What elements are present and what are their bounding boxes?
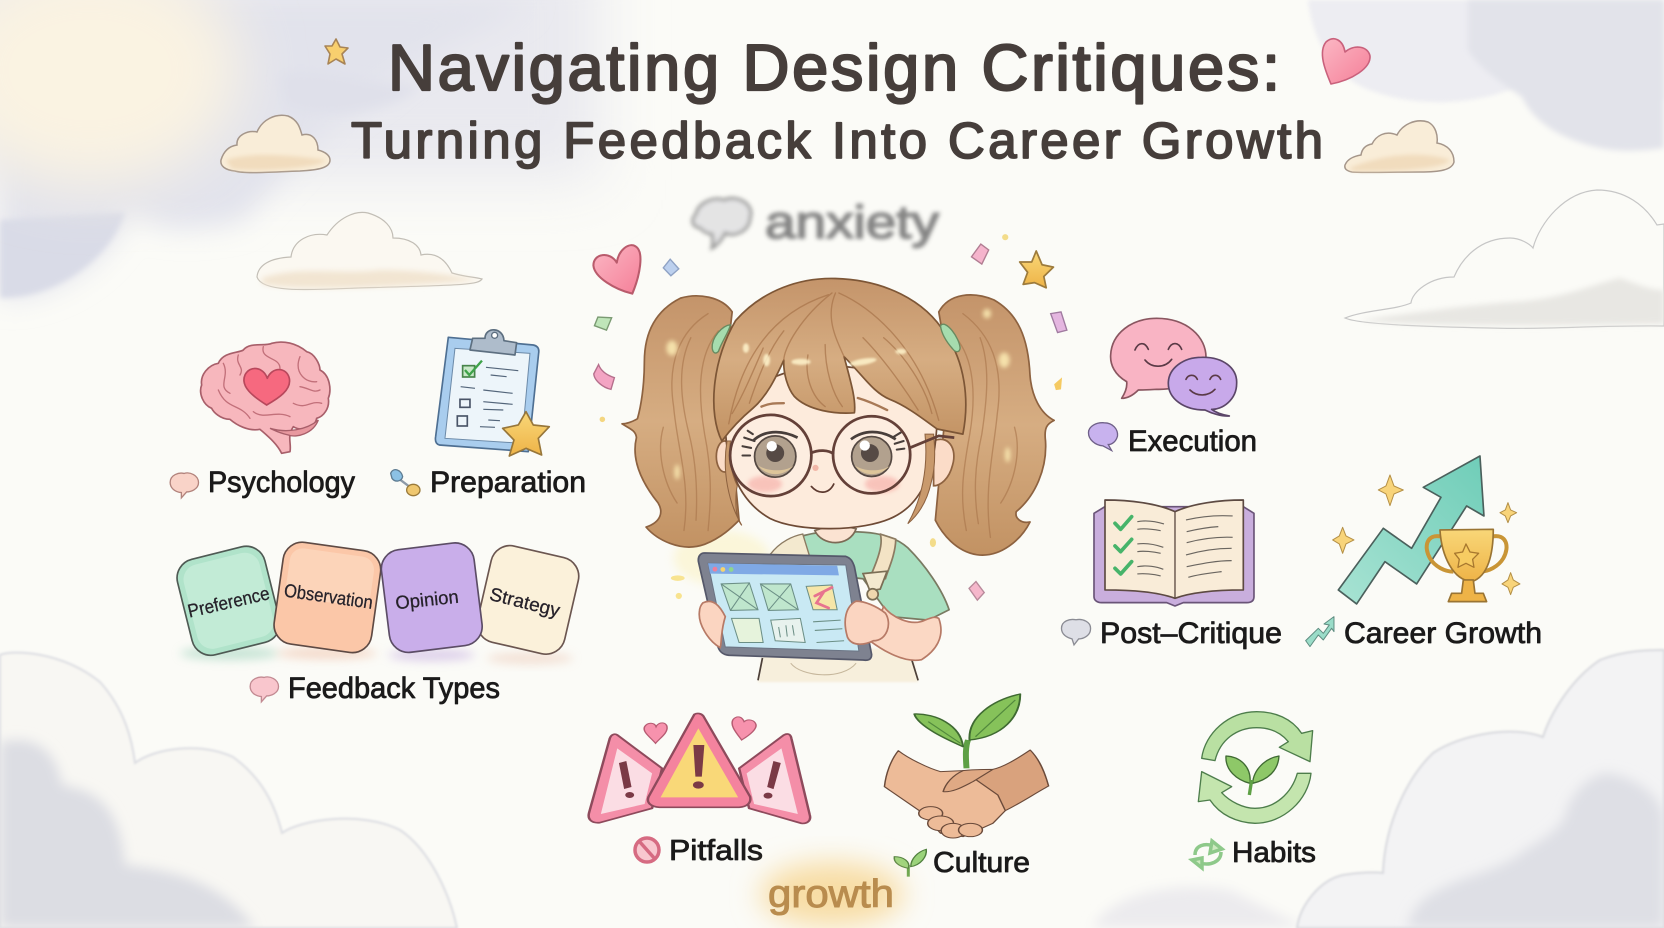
round glasses — [730, 415, 954, 496]
icon: no entry sign — [635, 838, 659, 862]
icon: brain with heart — [201, 342, 330, 453]
label: Post-Critique: Post–Critique — [1100, 617, 1282, 650]
icon: clipboard with star — [435, 330, 549, 456]
icon: pink speech bubble — [250, 677, 279, 702]
label: Career Growth: Career Growth — [1344, 617, 1542, 650]
decoration: title cloud right — [1345, 121, 1454, 172]
leaves — [1226, 756, 1250, 783]
icon: open book with checkmarks — [1094, 500, 1254, 606]
label: Culture: Culture — [933, 847, 1030, 879]
card: Opinion — [379, 541, 484, 655]
card labels: Strategy — [488, 583, 563, 621]
growth glowing label — [760, 862, 904, 926]
left warning triangle — [589, 734, 662, 823]
card: Strategy — [473, 542, 583, 658]
label: Execution: Execution — [1128, 425, 1257, 458]
background: bottom-right cloud — [1092, 650, 1664, 928]
hands on tablet — [699, 601, 888, 648]
icon: smiling chat bubbles — [1111, 318, 1237, 416]
card shadows — [180, 647, 573, 664]
anxiety text: anxiety — [765, 196, 939, 248]
title line 1: Navigating Design Critiques: — [388, 31, 1280, 104]
icon: rising arrow, trophy and sparkles — [1333, 456, 1520, 604]
centre warning triangle — [648, 713, 750, 807]
card labels: Observation — [283, 580, 374, 613]
growth arrow — [1338, 456, 1484, 604]
card labels: Opinion — [394, 586, 460, 613]
left arm — [884, 751, 1005, 837]
trophy — [1427, 529, 1507, 602]
card: Preference — [173, 542, 284, 659]
head and face — [716, 366, 954, 529]
icon: small sprout — [894, 849, 926, 877]
sparkles — [1333, 475, 1520, 595]
title — [351, 31, 1323, 169]
sprout — [914, 694, 1020, 768]
icon: pink heart top right — [1322, 39, 1370, 84]
decoration: title cloud left — [221, 115, 330, 173]
icon: small teal arrow — [1306, 617, 1334, 647]
tablet with wireframes — [698, 553, 872, 660]
icon: warning triangles with hearts — [589, 713, 810, 823]
icon: small cycle arrows — [1192, 841, 1222, 868]
icon: thought bubble — [693, 198, 751, 248]
confetti and sparkles — [593, 234, 1067, 600]
right warning triangle — [739, 734, 810, 823]
background: top-left watercolor wash — [0, 0, 600, 298]
icon: peach speech bubble — [170, 473, 199, 498]
bottom arrow — [1198, 772, 1311, 823]
background cloud: left middle — [257, 212, 482, 290]
pigtail strands and highlights — [661, 309, 1017, 537]
anxiety blurred label — [693, 196, 939, 248]
top arrow — [1202, 712, 1313, 762]
hearts — [644, 723, 667, 743]
card: Observation — [272, 540, 383, 655]
card labels — [186, 580, 563, 622]
fingers — [919, 807, 982, 838]
icon: small wrench — [391, 470, 420, 496]
label: Pitfalls: Pitfalls — [669, 835, 763, 867]
feedback type cards — [173, 540, 583, 664]
background cloud: right middle — [1345, 190, 1664, 328]
background: bottom-left cloud — [0, 653, 457, 928]
left pigtail — [622, 296, 739, 547]
label: Pitfalls — [635, 835, 763, 867]
icon: small gold star top left — [325, 39, 348, 64]
glow — [760, 862, 904, 926]
body: shirt and overall — [758, 524, 949, 682]
title line 2: Turning Feedback Into Career Growth — [351, 112, 1323, 169]
label: Culture — [894, 847, 1030, 879]
label: Psychology: Psychology — [208, 466, 355, 499]
label: Preparation: Preparation — [430, 466, 586, 499]
growth text: growth — [768, 873, 894, 916]
label: Habits — [1192, 837, 1316, 869]
thumb — [943, 769, 993, 792]
hair cap and bangs — [714, 278, 966, 441]
background: top-right watercolor clouds — [1308, 0, 1664, 151]
icon: recycling arrows with sprout — [1198, 712, 1313, 823]
bangs strands and hair ties — [712, 293, 960, 424]
icon: handshake with sprout — [884, 694, 1049, 838]
card labels: Preference — [186, 582, 271, 622]
right arm — [963, 750, 1049, 811]
icon: purple speech bubble — [1088, 423, 1118, 451]
character: girl with tablet and confetti — [593, 234, 1067, 682]
icon: grey speech bubble — [1061, 619, 1091, 645]
nose and mouth — [811, 465, 834, 492]
label: Feedback Types: Feedback Types — [288, 672, 500, 705]
right pigtail — [935, 295, 1054, 555]
eyes — [743, 398, 904, 477]
label: Habits: Habits — [1232, 837, 1316, 869]
